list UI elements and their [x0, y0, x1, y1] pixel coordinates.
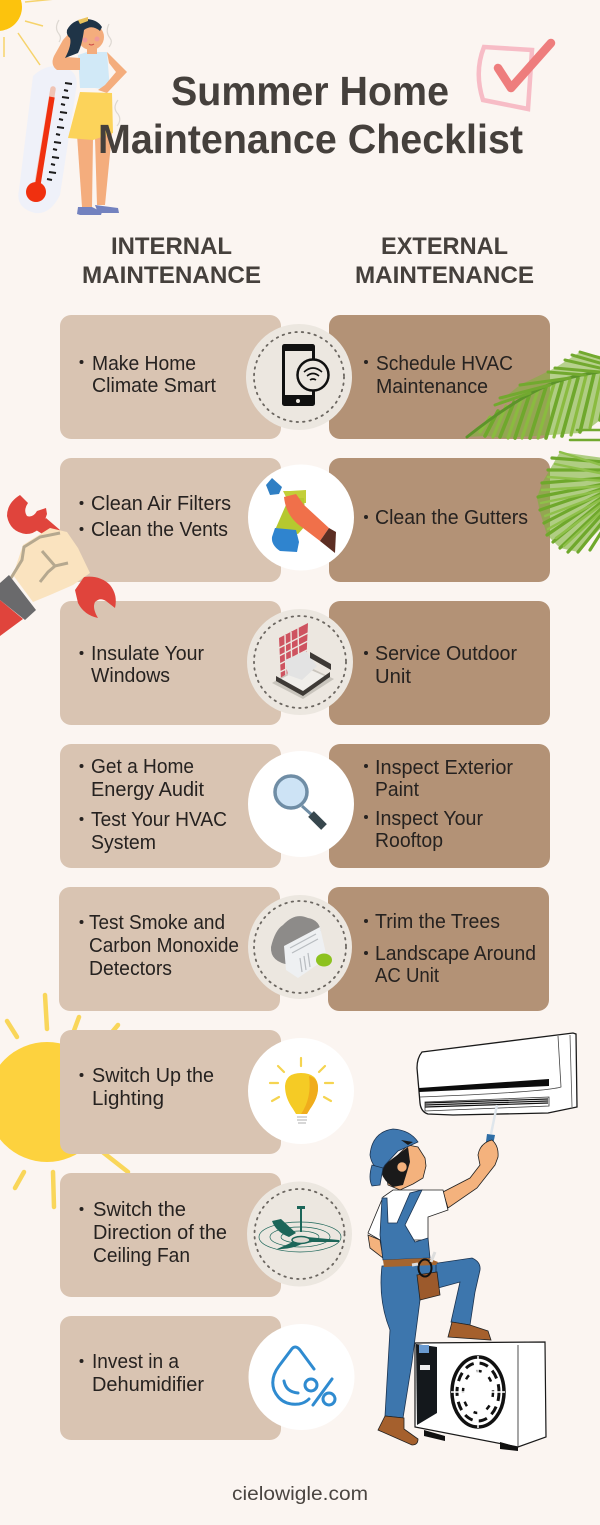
card: external 3: Unit — [375, 666, 411, 688]
card: external 4 — [329, 744, 550, 868]
illustration: technician repairing AC — [368, 1033, 577, 1451]
card: internal 5 — [59, 887, 280, 1011]
icon: spray bottle in hand — [248, 464, 354, 570]
card: external 3 — [329, 601, 550, 725]
card: internal 6: Lighting — [92, 1088, 164, 1110]
card: internal 8: Dehumidifier — [92, 1374, 204, 1396]
card: internal 4: Get a Home — [91, 756, 194, 778]
indoor AC unit — [417, 1033, 577, 1115]
card: external 4: Inspect Your — [375, 808, 483, 830]
illustration: bottom-left sun — [0, 995, 128, 1207]
card: external 4: Paint — [375, 779, 419, 801]
boot standing — [378, 1416, 418, 1445]
icon: humidity drop — [248, 1324, 354, 1430]
card: external 1: Maintenance — [376, 376, 488, 398]
card: internal 3: Windows — [91, 665, 170, 687]
card: internal 2: Clean the Vents — [91, 519, 228, 541]
head and cap — [370, 1129, 426, 1190]
arm — [443, 1140, 498, 1208]
card: external 5: Trim the Trees — [375, 911, 500, 933]
card: external 2 — [329, 458, 550, 582]
icon: check mark box — [479, 43, 551, 109]
card: internal 5: Carbon Monoxide — [89, 935, 239, 957]
card: internal 3: Insulate Your — [91, 643, 204, 665]
card: external 4: Inspect Exterior — [375, 757, 513, 779]
card: internal 7: Direction of the — [93, 1222, 227, 1244]
icon: ceiling fan — [247, 1182, 352, 1286]
card: external 1: Schedule HVAC — [376, 353, 513, 375]
title: Summer Home — [171, 68, 449, 114]
card: internal 6: Switch Up the — [92, 1065, 214, 1087]
raised leg — [432, 1258, 480, 1325]
card: internal 8 — [60, 1316, 281, 1440]
overalls bib — [380, 1190, 430, 1260]
card: external 2: Clean the Gutters — [375, 507, 528, 529]
illustration: thermometer — [18, 66, 77, 213]
title — [98, 68, 523, 162]
belt — [383, 1258, 438, 1267]
icon: smartphone with wifi — [246, 324, 352, 430]
card: external 5: Landscape Around — [375, 943, 536, 965]
card: internal 3 — [60, 601, 281, 725]
heading: external maintenance — [355, 233, 534, 289]
card: internal 4 — [60, 744, 281, 868]
icon: smoke with AC unit — [248, 895, 352, 999]
card: internal 1: Climate Smart — [92, 375, 216, 397]
card: external 5 — [328, 887, 549, 1011]
card: internal 6 — [60, 1030, 281, 1154]
footer: website: cielowigle.com — [232, 1484, 368, 1505]
heading: internal maintenance: MAINTENANCE — [82, 262, 261, 289]
forearm behind back — [368, 1235, 383, 1258]
icon: building with balcony — [247, 609, 353, 715]
card: external 1 — [329, 315, 550, 439]
illustration: overheated woman — [53, 17, 127, 215]
card: internal 8: Invest in a — [92, 1351, 180, 1373]
screwdriver — [485, 1105, 497, 1150]
icon: magnifying glass — [248, 751, 354, 857]
heading: external maintenance: MAINTENANCE — [355, 262, 534, 289]
shirt — [368, 1190, 448, 1240]
card: internal 1 — [60, 315, 281, 439]
card: internal 4: Energy Audit — [91, 779, 204, 801]
illustration: hand holding wrench — [0, 495, 116, 636]
boot raised — [448, 1322, 491, 1340]
card: external 4: Rooftop — [375, 830, 443, 852]
icon: top-left sun — [0, 0, 65, 65]
card: internal 2: Clean Air Filters — [91, 493, 231, 515]
heading: external maintenance: EXTERNAL — [381, 233, 508, 260]
heading: internal maintenance: INTERNAL — [111, 233, 232, 260]
card: internal 4: Test Your HVAC — [91, 809, 227, 831]
illustration: palm fronds — [467, 352, 600, 552]
card: internal 4: System — [91, 832, 156, 854]
icon: light bulb — [248, 1038, 354, 1144]
card: internal 1: Make Home — [92, 353, 196, 375]
heading: internal maintenance — [82, 233, 261, 289]
card: internal 5: Detectors — [89, 958, 172, 980]
card: internal 7: Switch the — [93, 1199, 186, 1221]
title: Maintenance Checklist — [98, 116, 523, 162]
card: internal 7: Ceiling Fan — [93, 1245, 190, 1267]
card: external 5: AC Unit — [375, 965, 439, 987]
card: internal 7 — [60, 1173, 281, 1297]
standing leg — [381, 1263, 436, 1418]
card: external 3: Service Outdoor — [375, 643, 517, 665]
card: internal 2 — [60, 458, 281, 582]
card: internal 5: Test Smoke and — [89, 912, 225, 934]
outdoor AC unit — [415, 1342, 546, 1451]
tool pouch — [412, 1252, 440, 1300]
